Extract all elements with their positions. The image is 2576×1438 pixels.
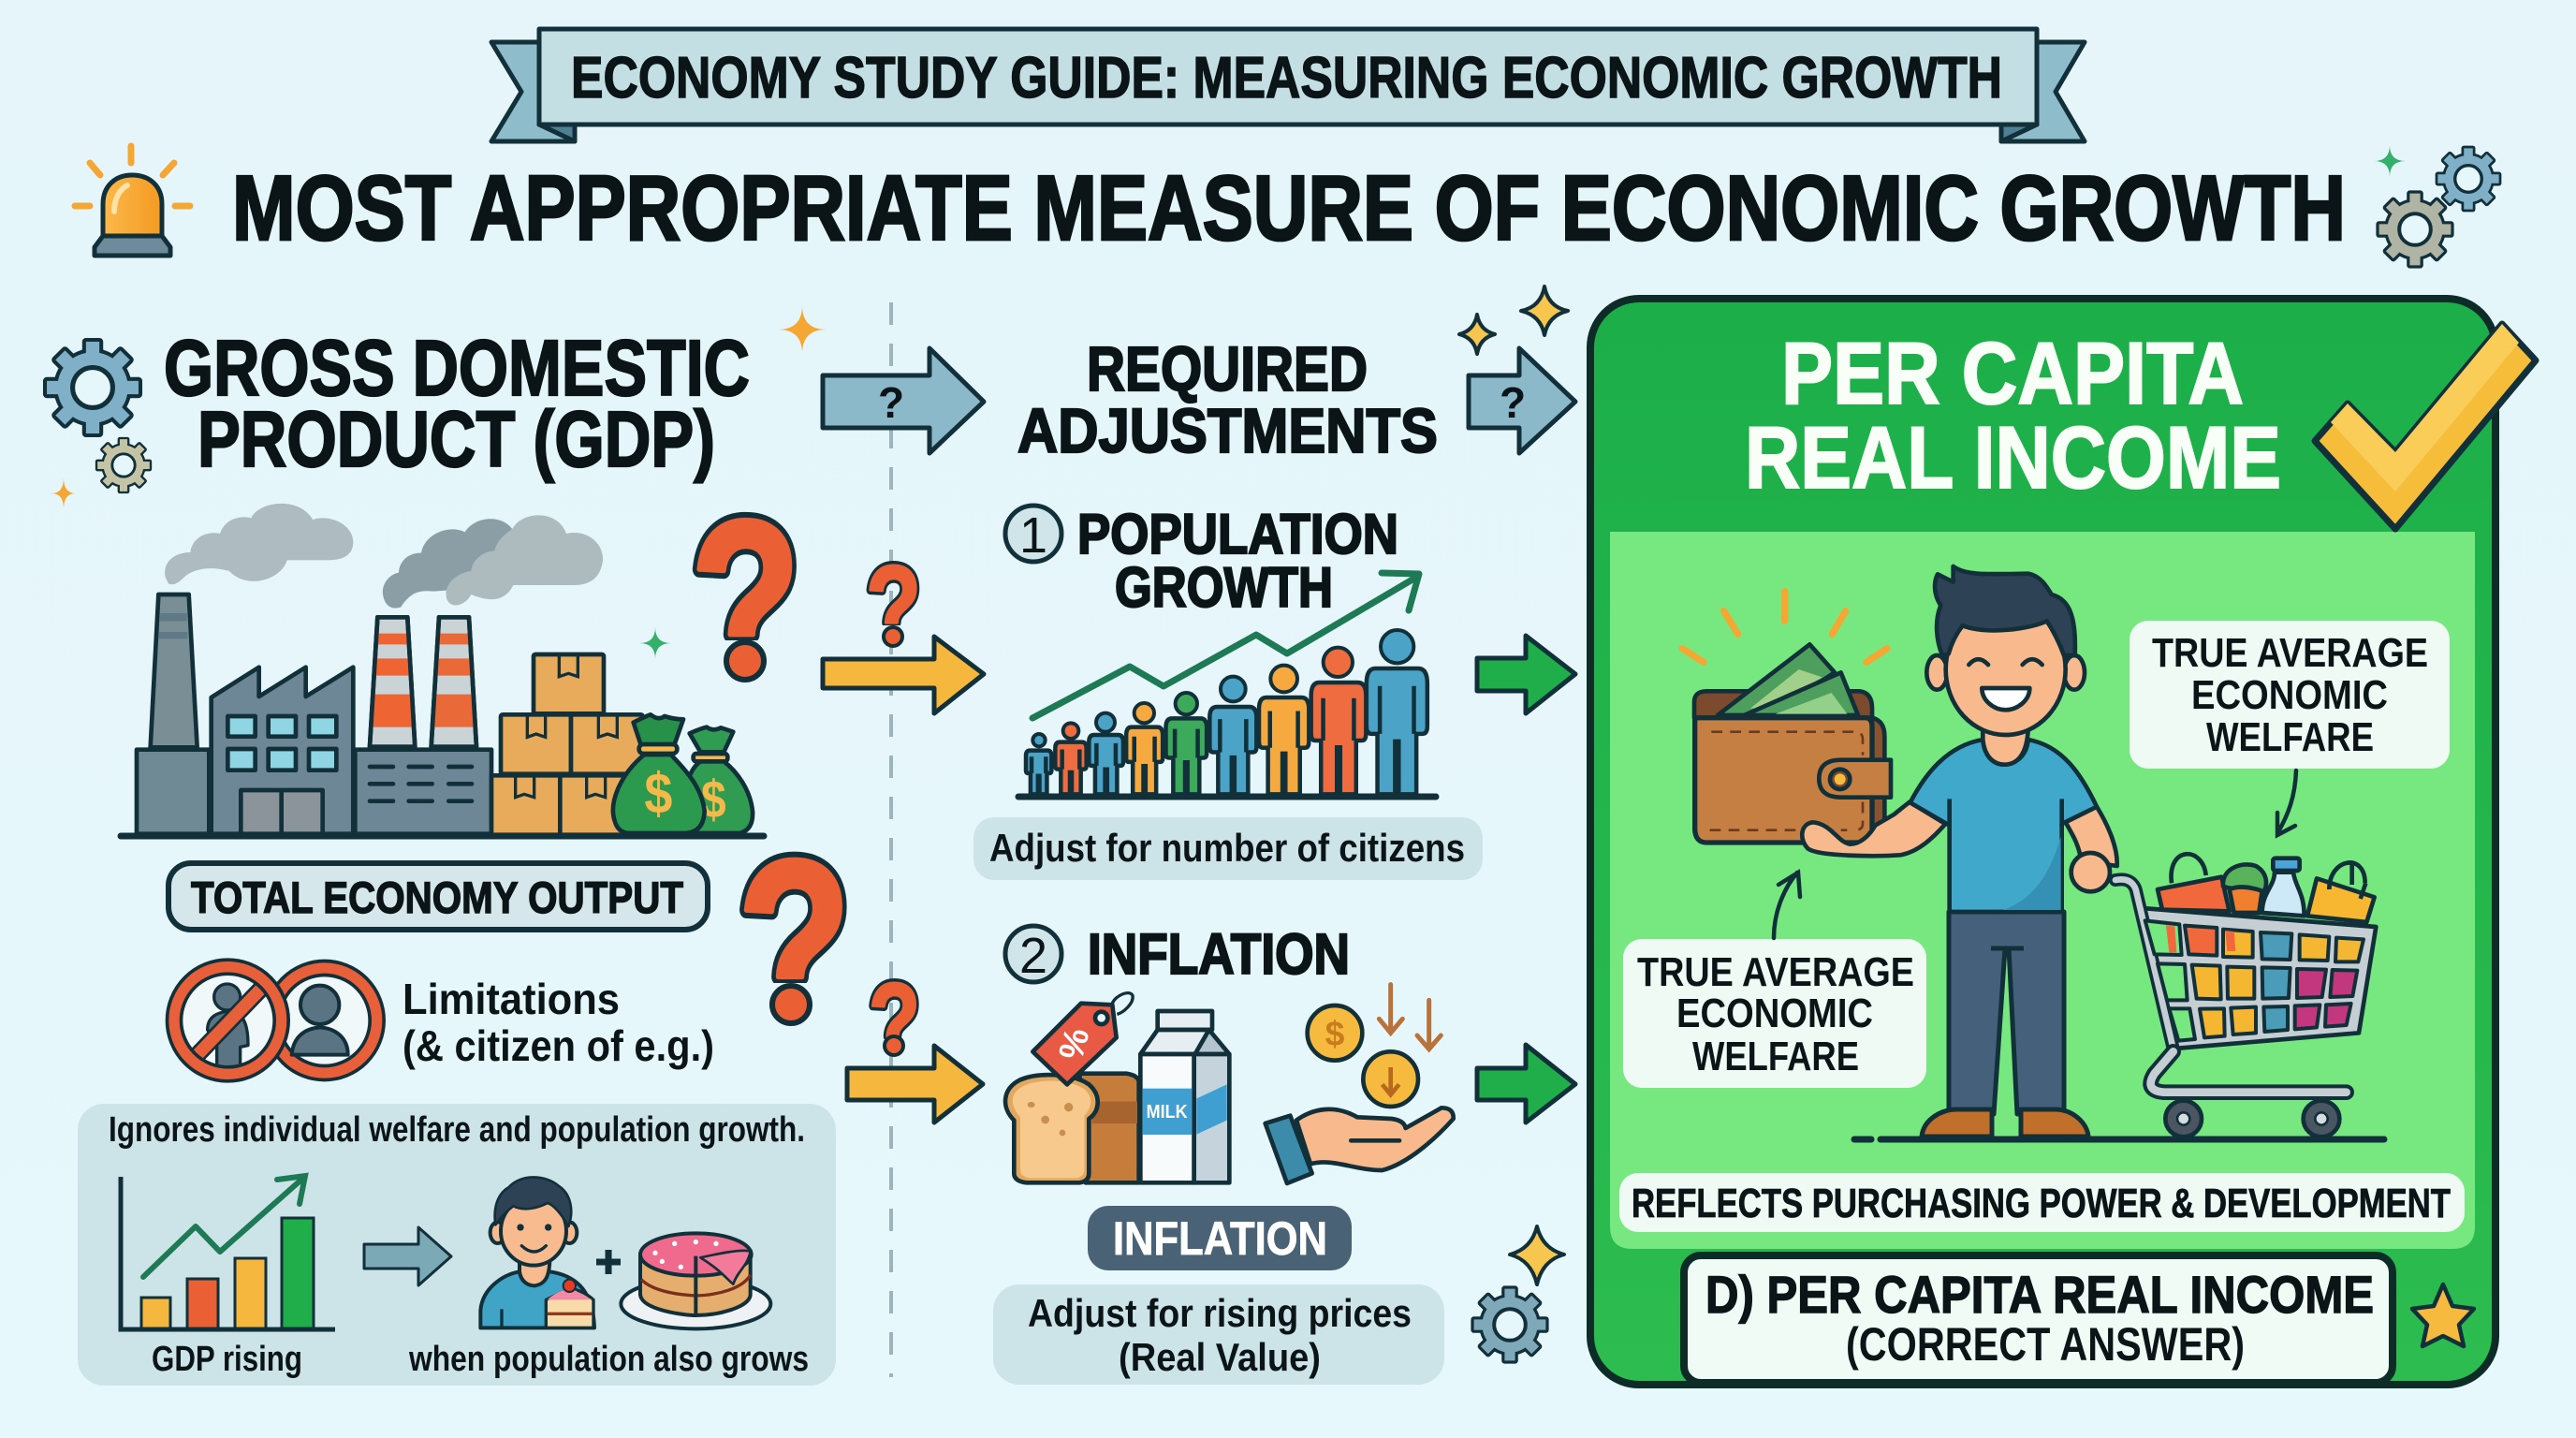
icon: wallet with cash — [1682, 592, 1891, 843]
icon: shopping cart — [2115, 854, 2376, 1137]
icon: person with cake slice — [480, 1177, 594, 1328]
icon: small question mark 2 — [869, 978, 919, 1057]
callout: welfare left: WELFARE — [1692, 1034, 1859, 1079]
icon: coins and arrows: $ — [1325, 1014, 1345, 1053]
icon: sparkle and gear lower — [1472, 1226, 1564, 1362]
caption — [993, 1284, 1444, 1385]
icon: alarm light — [75, 146, 190, 256]
arrow: yellow 2 — [847, 1046, 983, 1123]
pill: purchasing power — [1619, 1173, 2465, 1232]
icon: row of people — [1026, 630, 1427, 794]
icon: prohibited citizens — [174, 967, 377, 1074]
arrow: callout to wallet — [1774, 873, 1800, 938]
caption: Adjust for rising prices — [1028, 1291, 1412, 1335]
icon: price tag: % — [1050, 1023, 1097, 1064]
icon: small question mark 1: ? — [866, 543, 921, 672]
arrow: gdp to adjustments — [823, 348, 984, 453]
icon: small question mark 2: ? — [869, 961, 920, 1082]
icon: big question mark 2 — [739, 852, 847, 1026]
banner title: ECONOMY STUDY GUIDE: MEASURING ECONOMIC GROWTH — [571, 46, 2002, 110]
caption: (Real Value) — [1119, 1335, 1321, 1379]
inner light panel — [1610, 532, 2475, 1249]
heading: gdp: GROSS DOMESTIC — [164, 324, 750, 412]
callout: welfare top — [2130, 621, 2450, 769]
arrow: adjustments to per capita: ? — [1500, 378, 1526, 427]
number badge 2 — [1005, 926, 1061, 984]
icon: big question mark 2: ? — [738, 811, 851, 1077]
icon: milk carton: MILK — [1147, 1101, 1188, 1123]
ground — [1018, 794, 1436, 800]
arrow: callout to cart — [2277, 770, 2296, 835]
text: limitations: (& citizen of e.g.) — [402, 1021, 714, 1070]
answer box: D) PER CAPITA REAL INCOME — [1705, 1265, 2374, 1324]
answer box — [1684, 1255, 2393, 1383]
section: inflation — [993, 922, 1454, 1385]
icon: big question mark 1: ? — [691, 472, 800, 732]
ground — [121, 833, 764, 839]
icon: big question mark 2: ? — [738, 811, 851, 1077]
callout: welfare left — [1623, 939, 1926, 1088]
chart: growth line — [1032, 573, 1419, 718]
heading: gdp: PRODUCT (GDP) — [198, 395, 715, 483]
cake label: when population also grows — [408, 1340, 809, 1379]
callout: welfare left: TRUE AVERAGE — [1637, 949, 1914, 995]
chart label: GDP rising — [152, 1340, 302, 1379]
answer box: (CORRECT ANSWER) — [1846, 1318, 2245, 1371]
panel: limitation example — [78, 1104, 836, 1386]
label: inflation pill: INFLATION — [1113, 1212, 1327, 1265]
banner — [491, 29, 2085, 141]
label: total economy output — [168, 863, 708, 930]
heading: required adjustments: REQUIRED — [1087, 334, 1368, 404]
number badge 1: 1 — [1019, 507, 1047, 564]
heading: gdp — [164, 324, 750, 483]
caption — [973, 817, 1483, 880]
heading — [1077, 503, 1398, 619]
icon: open hand — [1266, 1108, 1454, 1183]
number badge 2: 2 — [1019, 928, 1047, 984]
icon: small question mark 1: ? — [866, 543, 921, 672]
heading: GROWTH — [1115, 556, 1333, 619]
arrow: gdp to adjustments: ? — [878, 378, 904, 427]
icon: sparkles near card — [1459, 286, 1568, 354]
heading — [1745, 324, 2281, 506]
sparkle — [639, 627, 671, 659]
heading: REAL INCOME — [1745, 408, 2281, 506]
icon: milk carton — [1140, 1011, 1229, 1182]
arrow: adjustments to per capita — [1469, 348, 1575, 453]
upper body and head — [1802, 566, 2117, 912]
panel: per capita real income — [1590, 299, 2536, 1385]
heading: PER CAPITA — [1781, 324, 2244, 422]
caption: Adjust for number of citizens — [989, 826, 1465, 870]
text: limitations: Limitations — [402, 975, 620, 1023]
icon: gdp gears and sparkles — [45, 305, 827, 509]
callout: welfare top: WELFARE — [2206, 714, 2374, 760]
limitation sentence: Ignores individual welfare and population growth. — [109, 1110, 805, 1150]
pants — [1949, 912, 2064, 1114]
heading: required adjustments: ADJUSTMENTS — [1017, 396, 1438, 466]
arrow: green 2 — [1477, 1045, 1575, 1123]
callout: welfare left: ECONOMIC — [1676, 990, 1873, 1036]
shoes — [1922, 1109, 2088, 1137]
divider — [889, 302, 893, 1377]
icon: star — [2412, 1284, 2474, 1346]
boxes and money bags: $ — [701, 770, 726, 829]
chart: gdp rising — [121, 1176, 335, 1329]
illustration: smiling man — [1802, 566, 2117, 1137]
icon: gold check mark — [2315, 324, 2536, 529]
illustration: factory — [121, 504, 764, 836]
number badge 1 — [1005, 506, 1061, 564]
icon: bread — [1005, 1074, 1139, 1182]
icon: big question mark 1 — [693, 511, 797, 682]
ground line — [1854, 1137, 2384, 1142]
section: population growth — [973, 503, 1483, 880]
boxes and money bags: $ — [644, 761, 672, 826]
arrow: to person — [364, 1227, 451, 1285]
heading: INFLATION — [1088, 922, 1350, 986]
arrow: yellow 1 — [823, 637, 984, 713]
icon: top right gears and sparkle — [2374, 145, 2500, 267]
callout: welfare top: TRUE AVERAGE — [2152, 630, 2428, 676]
label: total economy output: TOTAL ECONOMY OUTPUT — [191, 873, 683, 922]
icon: cake — [621, 1233, 770, 1328]
heading: required adjustments — [1017, 334, 1438, 466]
heading: POPULATION — [1077, 503, 1398, 565]
icon: small question mark 1 — [867, 561, 919, 648]
icon: big question mark 1: ? — [691, 472, 800, 732]
boxes and money bags — [491, 654, 753, 835]
icon: small question mark 2: ? — [869, 961, 920, 1082]
text: limitations — [402, 975, 714, 1070]
arrow: green 1 — [1477, 636, 1575, 713]
icon: price tag — [1032, 993, 1133, 1084]
callout: welfare top: ECONOMIC — [2191, 672, 2388, 718]
icon: coins and arrows — [1308, 985, 1441, 1107]
smoke and buildings — [137, 504, 603, 834]
plus sign — [596, 1250, 621, 1274]
